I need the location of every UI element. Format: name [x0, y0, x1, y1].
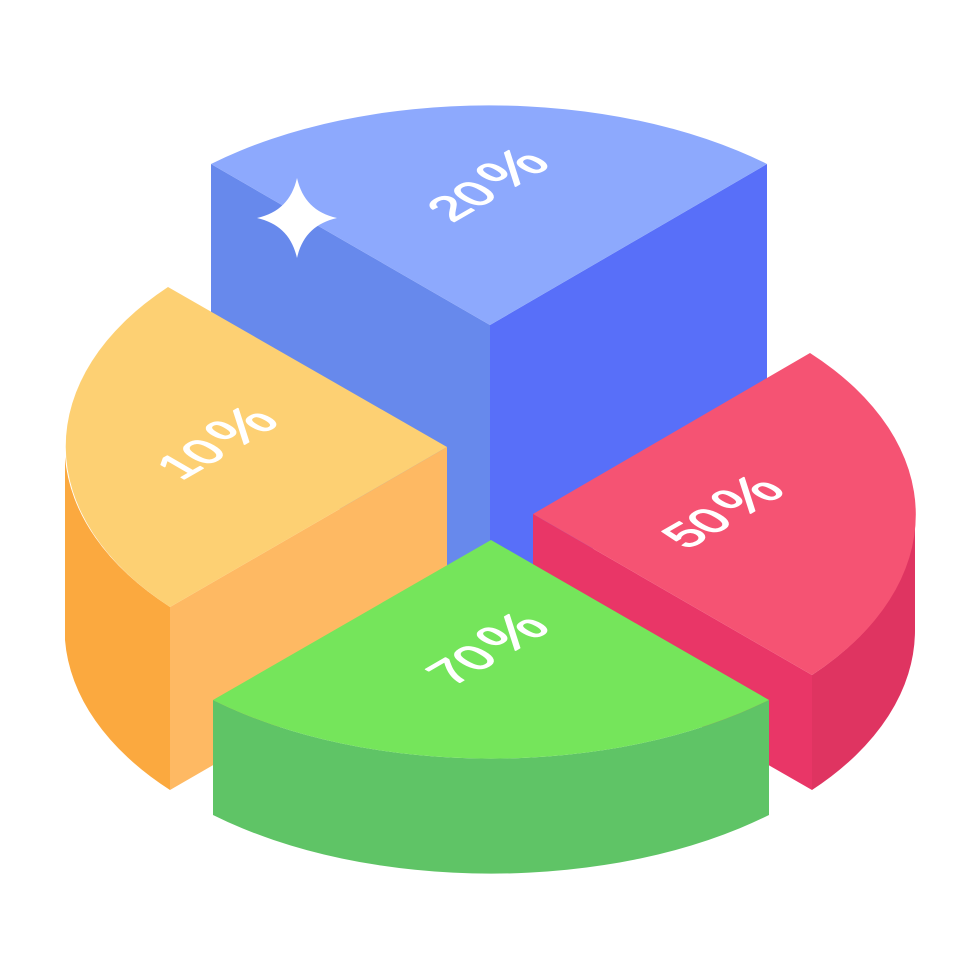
red top face [533, 353, 916, 675]
icon: sparkle [257, 178, 337, 258]
label: 10%: 10% [135, 396, 293, 487]
yellow top face [66, 287, 447, 607]
blue top face [211, 105, 767, 325]
green top face [213, 540, 769, 759]
slice: yellow 10% [65, 287, 447, 790]
green front wall [213, 700, 769, 874]
label: 20%: 20% [406, 138, 564, 229]
yellow outer wall [65, 457, 170, 790]
slice: green 70% [213, 540, 769, 874]
blue left wall [211, 164, 490, 600]
blue right wall [490, 164, 767, 600]
yellow inner wall [170, 447, 447, 790]
slice: red 50% [533, 353, 916, 790]
slice: blue 20% [211, 105, 767, 600]
red outer wall [812, 510, 915, 790]
red inner wall [533, 514, 812, 790]
label: 50%: 50% [641, 465, 799, 556]
label: 70%: 70% [406, 602, 564, 693]
